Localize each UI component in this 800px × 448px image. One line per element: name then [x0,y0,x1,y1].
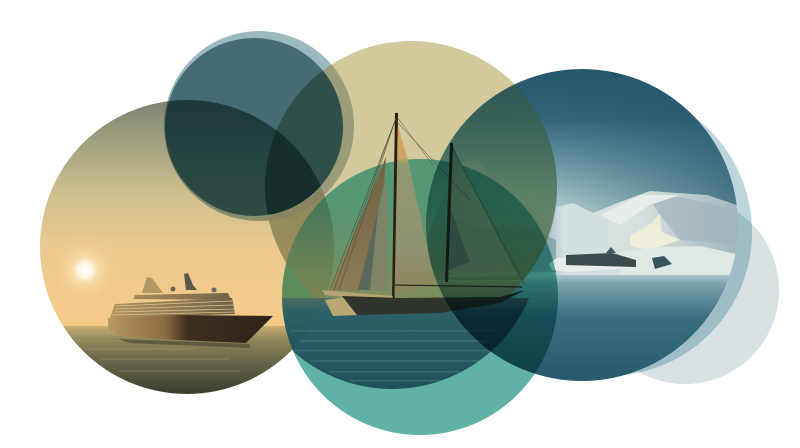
rear sail [447,143,517,277]
ice shelf [620,246,736,276]
icon: schooner and sea [282,113,529,389]
tan and sunset overlap tint [268,186,332,263]
panel: glacier ship circle [426,69,738,381]
glacier highlights [630,214,680,250]
icon: small expedition ship [549,247,672,272]
mountain shadows [530,236,556,272]
panel: pale grey circle [591,196,779,384]
hull [342,290,525,315]
sky [428,69,736,213]
masts [392,113,398,298]
panel: teal circle [282,159,558,435]
panel: top outer ring circle [164,31,354,221]
panel: light blue backing circle [464,88,752,376]
foresail [331,157,386,291]
sea with sun reflections [63,326,292,394]
teal and tan sky tint [286,159,542,298]
panel: top dark circle [165,38,343,216]
panel: tan circle [265,41,557,333]
deck [322,290,393,298]
mainsail [394,123,435,295]
glacier mountains [468,160,738,275]
sun glow [64,250,106,292]
sea in yacht image [282,298,529,389]
icon: cruise ship [108,273,273,348]
glacier circle white base [426,69,738,381]
sunset sky [40,99,336,331]
panel: sunset cruise ship circle [40,99,336,396]
boom [393,285,522,287]
rigging [330,117,525,290]
dark circle overlap tints [165,70,343,216]
staysail [368,178,388,291]
yacht reflection [325,297,357,316]
water [435,275,730,381]
ring and tan overlap tint [268,65,354,220]
tan overlap darkening [426,84,557,280]
warm haze near horizon [286,220,542,298]
